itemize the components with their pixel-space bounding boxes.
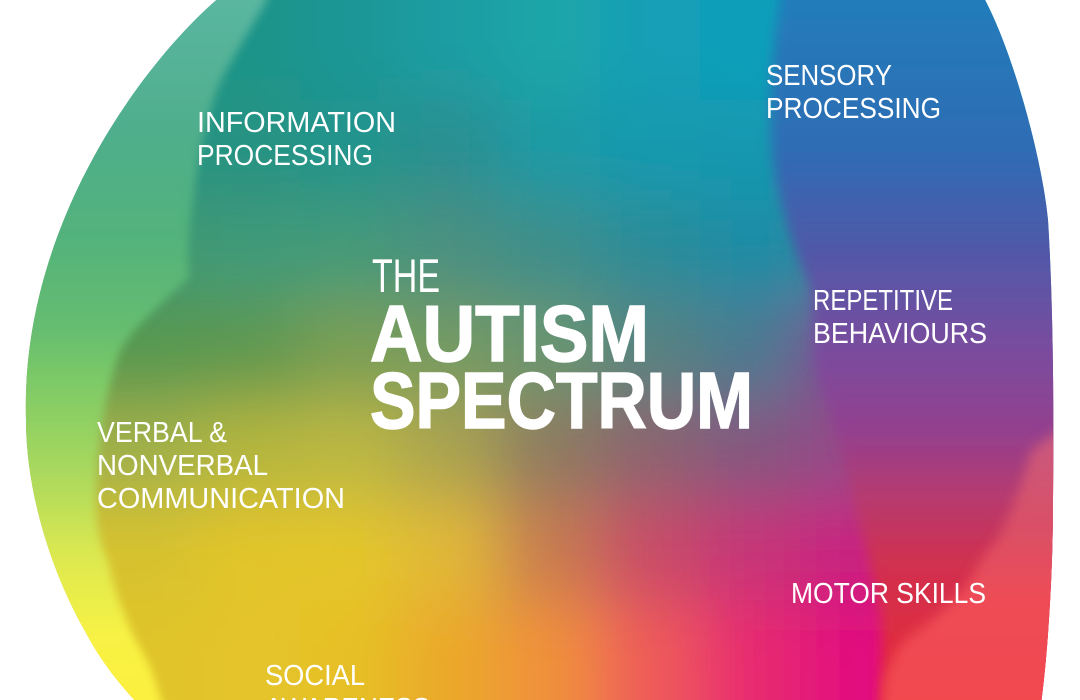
- label: verbal and nonverbal communication: COMMUNICATION: [97, 483, 345, 515]
- label: sensory processing: SENSORY: [766, 60, 892, 92]
- label: repetitive behaviours: REPETITIVE: [813, 285, 953, 317]
- label: information processing: [197, 107, 396, 172]
- label: social awareness: SOCIAL: [265, 660, 365, 692]
- title: SPECTRUM: [370, 356, 753, 445]
- label: sensory processing: PROCESSING: [766, 93, 941, 125]
- label: motor skills: MOTOR SKILLS: [791, 578, 986, 610]
- title: THE: [372, 249, 440, 302]
- label: information processing: INFORMATION: [197, 107, 396, 139]
- label: verbal and nonverbal communication: VERBAL &: [97, 417, 227, 449]
- label: repetitive behaviours: BEHAVIOURS: [813, 318, 987, 350]
- label: repetitive behaviours: [813, 285, 987, 350]
- label: sensory processing: [766, 60, 941, 125]
- label: social awareness: [265, 660, 430, 700]
- label: verbal and nonverbal communication: [97, 417, 345, 515]
- label: verbal and nonverbal communication: NONVERBAL: [97, 450, 268, 482]
- title: AUTISM: [370, 289, 649, 378]
- label: information processing: PROCESSING: [197, 140, 373, 172]
- title: [370, 249, 753, 445]
